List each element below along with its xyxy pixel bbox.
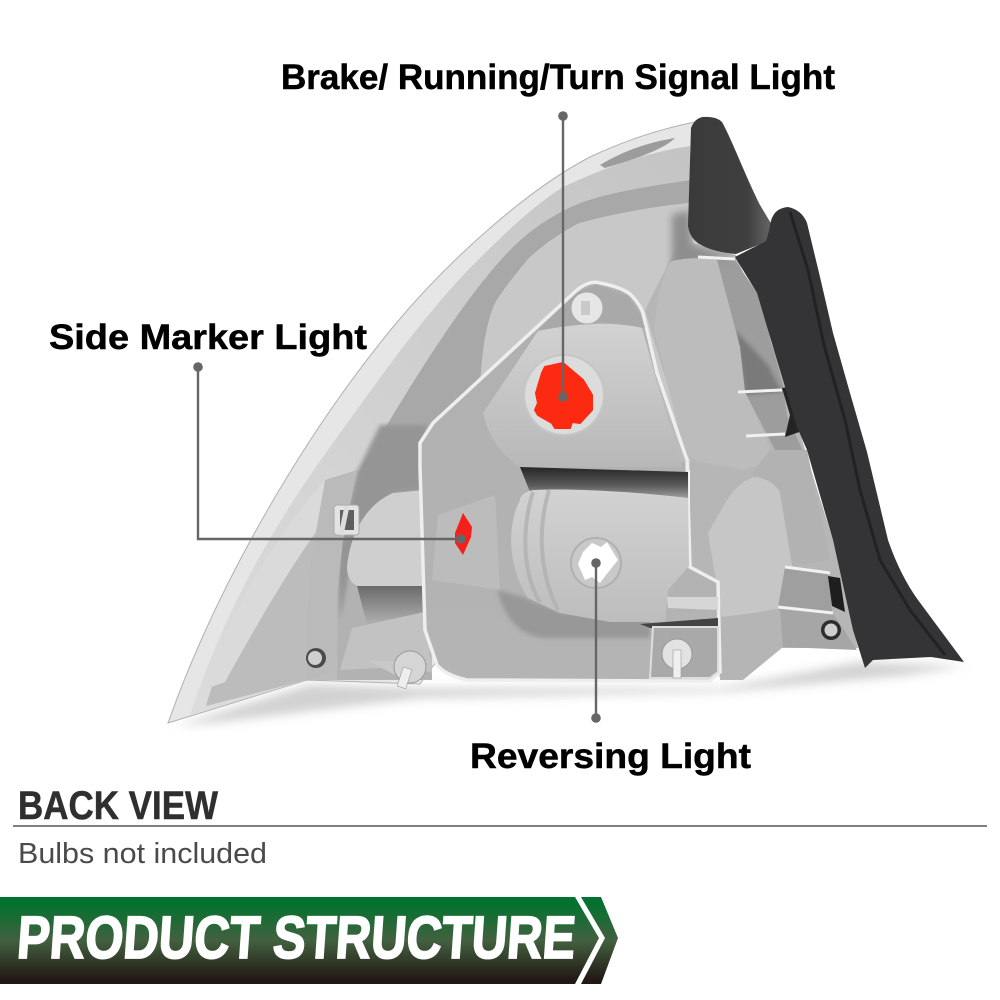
upper dark clips [782,386,805,437]
side connector [334,505,359,535]
banner arrow tip [581,897,618,984]
back view heading: BACK VIEW [18,784,218,828]
right housing base [645,240,858,678]
seal inner ridge [790,212,945,655]
lens light strip [203,478,340,690]
top lens reflector [600,138,675,168]
right upper dark plate [717,260,808,462]
connector dark slot [640,618,718,628]
right screw [821,620,841,640]
left column [307,470,357,680]
left housing stack lower [340,612,432,672]
right lower lobe [708,477,795,617]
left wall shadow [338,425,427,620]
lens outer rim [168,122,700,723]
brake light leader [558,111,568,402]
reversing light label: Reversing Light [470,737,751,776]
frame bolt recess [538,285,645,330]
right upper plate shadow [735,330,782,395]
right stud [662,639,692,678]
left stud [367,651,426,689]
left housing dark recess [357,586,425,624]
lower dome recess shadow [497,590,650,638]
upper bulb dome inside frame [483,324,682,467]
banner title: PRODUCT STRUCTURE [15,904,578,971]
side marker label: Side Marker Light [49,318,367,357]
frame right shoulder [640,330,686,462]
right clip section [778,567,832,612]
product structure banner [0,897,618,984]
lower bulb dome [511,489,689,622]
right corner shadow [672,210,735,280]
lens lower panel [206,470,360,706]
brake light label: Brake/ Running/Turn Signal Light [281,58,835,97]
right upper lobe [654,258,770,470]
left base underlay [337,540,432,680]
left housing stack upper [347,490,425,586]
lower base block [720,610,783,680]
brake lamp socket [524,355,604,435]
reversing lamp socket [571,538,621,588]
right lower plate [752,450,830,590]
upper dome [480,203,700,470]
frame panel [420,282,720,681]
dark inner band [345,180,690,560]
upper seal block [688,117,772,254]
white clips on right [698,257,833,613]
side marker red opening [455,513,472,555]
lens light band [190,146,690,715]
bulbs note: Bulbs not included [18,838,267,870]
dark gap between domes [520,467,688,500]
banner body [0,897,599,984]
side marker leader [193,362,466,544]
right bottom plate [778,607,857,650]
tail light product [168,117,966,726]
main rubber seal [735,207,964,668]
top bolt [571,292,603,324]
ground shadow [175,662,966,726]
lower dark clips [828,576,845,612]
notch shelf bar [667,597,718,610]
bottom connector box [650,627,718,678]
left screw [306,648,326,668]
frame left lower shading [432,495,500,590]
lower dome ribs [525,490,558,610]
reversing light leader [591,558,601,723]
